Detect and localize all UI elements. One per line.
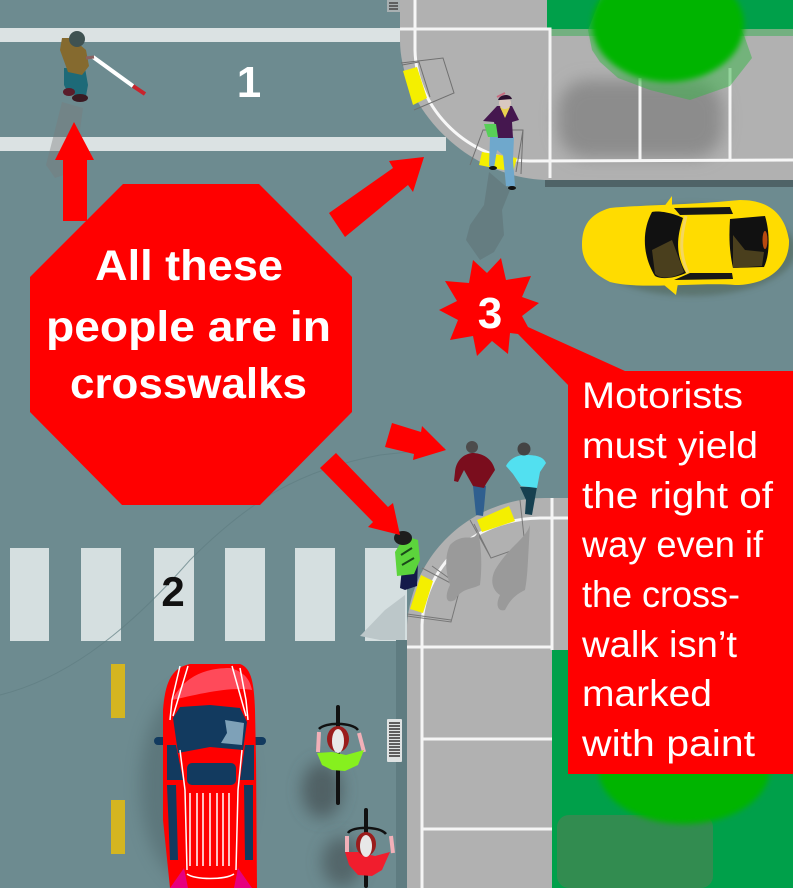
arrow to woman on sidewalk (329, 157, 424, 237)
pedestrian 1: person with white cane (46, 31, 145, 178)
number 2: 2 (161, 568, 185, 615)
shadow (46, 102, 83, 178)
pedestrian 4: man in light blue shirt (506, 442, 546, 515)
tree, bottom right (598, 712, 770, 824)
cane (93, 57, 133, 86)
torso (483, 106, 519, 138)
crosswalk 2: zebra stripes (10, 548, 407, 641)
red note panel (568, 371, 793, 774)
cyclist in red shirt (322, 808, 393, 888)
legs (64, 68, 88, 98)
arrow to man in dark red jacket (385, 423, 446, 460)
coat (60, 38, 89, 75)
faint road crack line (0, 448, 445, 695)
note text: the cross- (582, 574, 740, 615)
octagon text: people are in (46, 303, 331, 351)
starburst with number 3 and tail to note: 3 (478, 289, 502, 338)
note text: walk isn’t (581, 624, 738, 665)
note text: the right of (582, 475, 774, 516)
octagon text: crosswalks (70, 360, 307, 408)
cyclist in green shirt (302, 705, 364, 818)
note text: marked (582, 673, 712, 714)
note text: must yield (582, 425, 758, 466)
note text: Motorists (582, 375, 743, 416)
top-right corner: sidewalk and lawn (387, 0, 793, 187)
number 1: 1 (237, 58, 261, 107)
yellow centre line dashes (111, 664, 125, 854)
arrow up to person with cane (55, 122, 94, 221)
octagon text: All these (95, 242, 283, 290)
storm drain (387, 719, 402, 762)
octagon callout (30, 184, 352, 505)
arrow to person in green jacket (320, 453, 400, 535)
red car (140, 664, 266, 888)
crosswalk 1: two parallel white lines (0, 28, 446, 151)
pedestrian 3: man in dark red jacket (454, 441, 495, 516)
starburst with number 3 and tail to note (439, 258, 625, 400)
octagon text (46, 242, 331, 408)
shadow (466, 172, 510, 260)
pedestrian shadows on bottom sidewalk (446, 530, 481, 601)
note text: way even if (581, 524, 764, 565)
note text (581, 375, 774, 764)
tree, top right (588, 0, 752, 100)
note text: with paint (581, 723, 756, 764)
pedestrian 5: person in green jacket (394, 531, 420, 590)
bottom-right corner: sidewalk and lawn (360, 498, 793, 888)
yellow car (582, 196, 793, 296)
pedestrian 2: woman on top sidewalk (466, 93, 519, 260)
